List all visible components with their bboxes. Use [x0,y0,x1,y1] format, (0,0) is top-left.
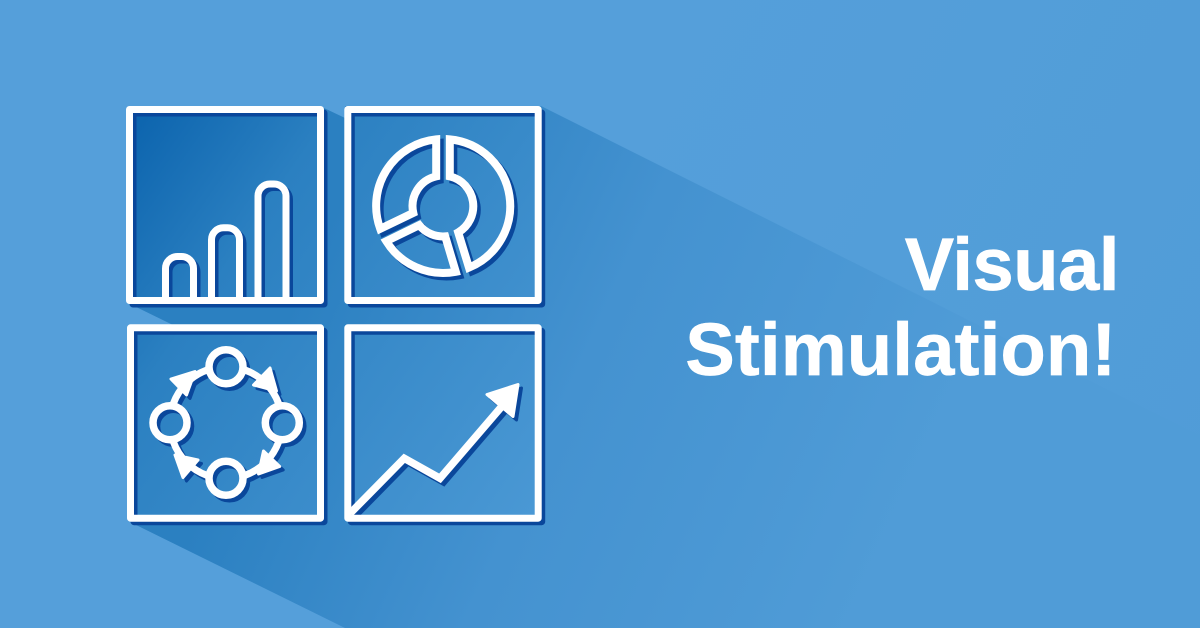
title [685,223,1119,391]
panel: donut chart [348,110,542,304]
long diagonal shadow [130,106,1200,628]
title: Stimulation! [685,308,1116,391]
title: Visual [905,223,1119,306]
panel: rising trend arrow [348,328,542,522]
panel: bar chart [130,110,324,304]
panel: cycle diagram [130,328,324,522]
icon grid [130,110,542,522]
